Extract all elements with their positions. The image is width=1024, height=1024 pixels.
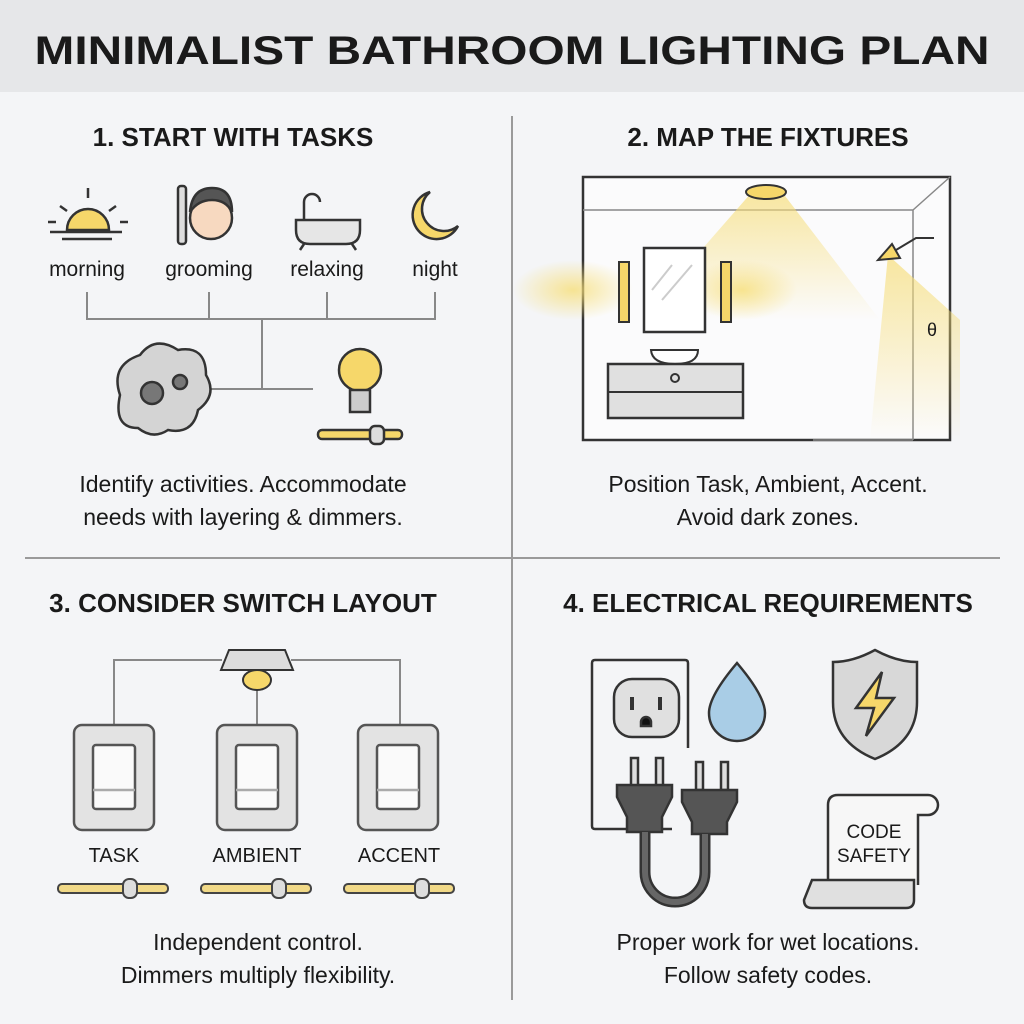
switches — [74, 725, 438, 830]
caption 1: Identify activities. Accommodate — [79, 471, 407, 497]
panel: switch layout: AMBIENT — [213, 845, 301, 867]
room diagram: θ — [927, 320, 937, 340]
icon: ceiling lamp — [221, 650, 293, 690]
panel: switch layout: TASK — [89, 845, 140, 867]
heading 4: 4. ELECTRICAL REQUIREMENTS — [563, 588, 973, 618]
caption 2: Position Task, Ambient, Accent. — [608, 471, 928, 497]
panel: electrical: Follow safety codes. — [664, 962, 872, 988]
title band — [0, 0, 1024, 92]
icon: code safety scroll: SAFETY — [837, 846, 911, 867]
panel: start with tasks: morning — [49, 258, 125, 281]
caption 3: Independent control. — [153, 929, 363, 955]
icon: shield bolt — [833, 650, 917, 759]
panel: start with tasks: needs with layering & dimmers. — [83, 504, 403, 530]
icon: code safety scroll: CODE — [847, 822, 901, 843]
panel: switch layout: ACCENT — [358, 845, 440, 867]
panel: map the fixtures — [513, 122, 960, 530]
icon: moon — [413, 192, 458, 239]
panel: electrical — [563, 588, 973, 988]
icon: brain gears — [118, 344, 210, 435]
heading 3: 3. CONSIDER SWITCH LAYOUT — [49, 588, 437, 618]
caption 4: Proper work for wet locations. — [617, 929, 919, 955]
icon: water drop — [709, 663, 765, 741]
icon: bathtub — [296, 194, 360, 250]
panel: start with tasks — [48, 122, 458, 530]
panel: switch layout — [49, 588, 454, 988]
panel: map the fixtures: Avoid dark zones. — [677, 504, 859, 530]
wiring — [114, 660, 400, 725]
connector tree — [87, 292, 435, 389]
panel: start with tasks: relaxing — [290, 258, 364, 281]
panel: start with tasks: night — [412, 258, 458, 281]
panel: switch layout: Dimmers multiply flexibility. — [121, 962, 395, 988]
icon: grooming — [178, 186, 232, 244]
heading 1: 1. START WITH TASKS — [93, 122, 373, 152]
heading 2: 2. MAP THE FIXTURES — [627, 122, 909, 152]
title band: MINIMALIST BATHROOM LIGHTING PLAN — [34, 29, 990, 73]
room diagram — [513, 177, 960, 440]
icon: outlet and plugs — [592, 660, 737, 902]
icon: sunrise — [48, 188, 128, 239]
icon: code safety scroll — [804, 795, 938, 908]
panel: start with tasks: grooming — [165, 258, 253, 281]
dimmer sliders — [58, 879, 454, 898]
icon: bulb with dimmer — [318, 349, 402, 444]
